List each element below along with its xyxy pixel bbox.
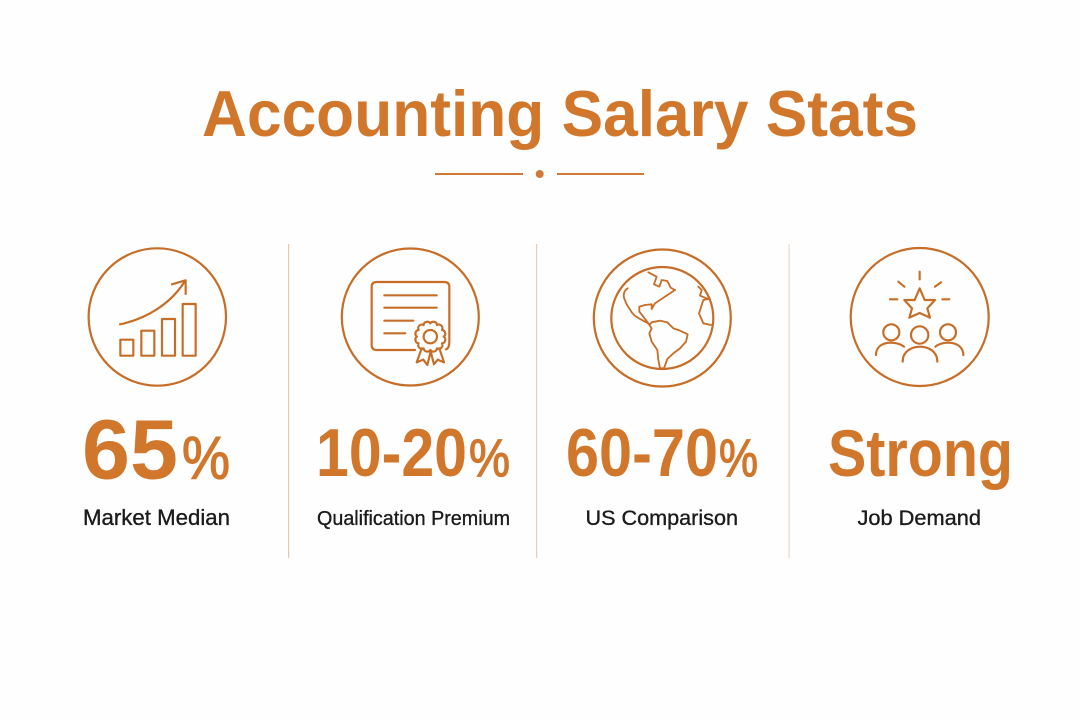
label: qualification premium: Qualification Premium — [317, 507, 510, 530]
label: us comparison: US Comparison — [586, 506, 738, 530]
panel: qualification premium — [316, 248, 510, 530]
title divider — [435, 170, 644, 178]
icon: rising bar chart — [89, 248, 226, 386]
stat: 10-20%: % — [469, 429, 510, 488]
icon: certificate — [342, 248, 479, 386]
stat: 65% — [82, 402, 230, 496]
label: market median: Market Median — [83, 505, 230, 530]
panel: us comparison — [566, 250, 758, 530]
panel: job demand — [828, 248, 1013, 530]
stat: 60-70%: % — [719, 429, 758, 488]
title: Accounting Salary Stats — [202, 77, 918, 150]
icon: globe — [594, 250, 731, 386]
stat: strong: Strong — [828, 416, 1013, 490]
stat: 65%: % — [182, 424, 230, 492]
stat: 10-20%: 10-20 — [316, 415, 467, 491]
panel: market median — [82, 248, 230, 530]
stat: 60-70%: 60-70 — [566, 415, 718, 491]
label: job demand: Job Demand — [858, 507, 981, 530]
stat: 65%: 65 — [82, 402, 178, 496]
icon: team with star — [851, 248, 989, 386]
